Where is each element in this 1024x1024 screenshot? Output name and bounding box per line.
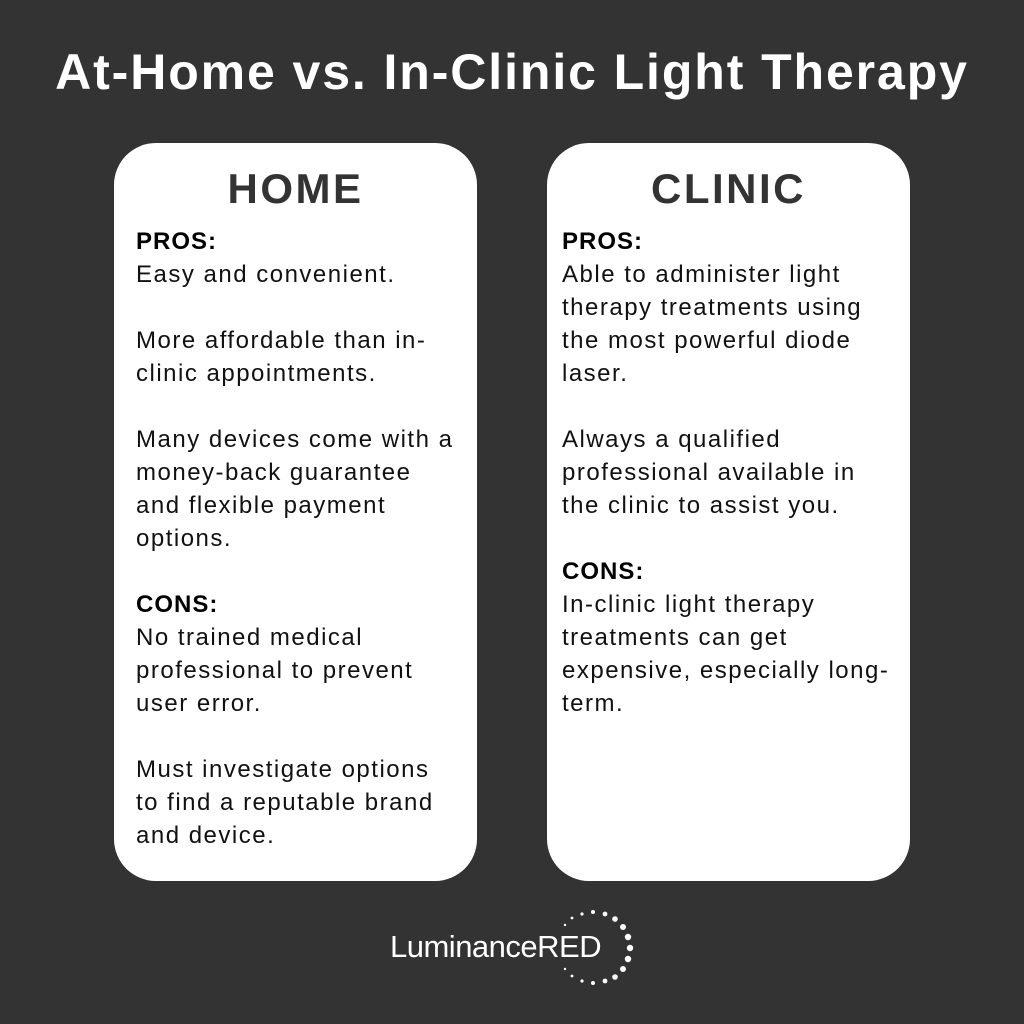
text block: clinic pros and cons: PROS: [562,228,643,255]
text block: home pros and cons: Many devices come with a [136,426,453,453]
text block: home pros and cons: to find a reputable brand [136,789,434,816]
text block: home pros and cons: PROS: [136,228,217,255]
logo: LuminanceRED [390,929,601,964]
text block: clinic pros and cons: the most powerful diode [562,327,851,354]
title: At-Home vs. In-Clinic Light Therapy [55,44,969,100]
panel: home [114,143,477,881]
text block: clinic pros and cons: Able to administer light [562,261,841,288]
text block: clinic pros and cons: expensive, especially long- [562,657,889,684]
text block: home pros and cons: CONS: [136,591,218,618]
text block: home pros and cons: More affordable than in- [136,327,426,354]
text block: home pros and cons: No trained medical [136,624,363,651]
icon: dot arc [564,910,634,985]
text block: clinic pros and cons: laser. [562,360,628,387]
text block: home pros and cons: and flexible payment [136,492,386,519]
panel: clinic [547,143,910,881]
text block: home pros and cons [136,228,453,849]
text block: clinic pros and cons: term. [562,690,624,717]
text block: home pros and cons: Easy and convenient. [136,261,396,288]
text block: home pros and cons: and device. [136,822,275,849]
text block: clinic pros and cons: In-clinic light therapy [562,591,815,618]
text block: clinic pros and cons: CONS: [562,558,644,585]
text block: home pros and cons: user error. [136,690,262,717]
text block: clinic pros and cons: the clinic to assist you. [562,492,840,519]
text block: clinic pros and cons: therapy treatments using [562,294,862,321]
text block: home pros and cons: options. [136,525,232,552]
heading: home: HOME [228,165,364,212]
text block: clinic pros and cons: treatments can get [562,624,788,651]
text block: clinic pros and cons: Always a qualified [562,426,781,453]
text block: clinic pros and cons: professional available in [562,459,856,486]
text block: home pros and cons: clinic appointments. [136,360,377,387]
text block: home pros and cons: Must investigate options [136,756,429,783]
heading: clinic: CLINIC [651,165,806,212]
text block: clinic pros and cons [562,228,889,717]
text block: home pros and cons: professional to prevent [136,657,413,684]
text block: home pros and cons: money-back guarantee [136,459,411,486]
logo [390,910,634,985]
